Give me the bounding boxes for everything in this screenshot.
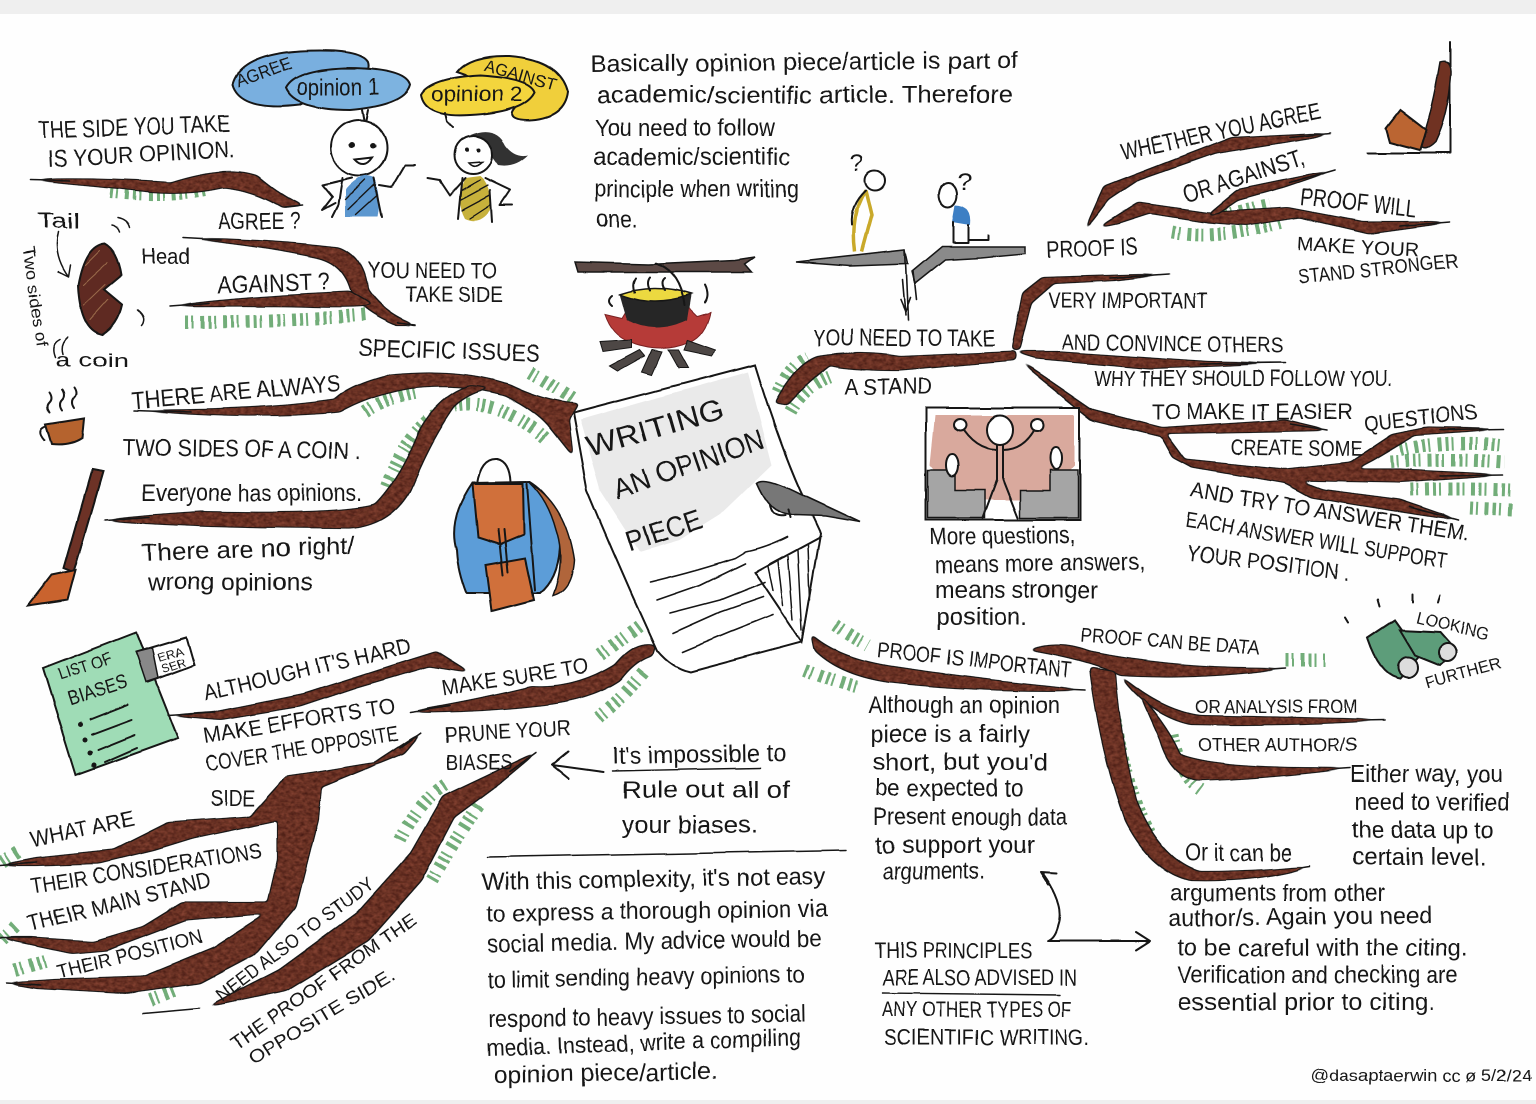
icon: pen: [757, 481, 860, 522]
branch: although it's hard and the tree: COVER THE OPPOSITE: [204, 721, 400, 776]
branch: proof is important: Or it can be: [1185, 840, 1292, 867]
icon: speech bubbles: opinion 2: [431, 83, 523, 106]
text: arguments from other authors: arguments from other: [1170, 880, 1385, 907]
main left branch: THERE ARE ALWAYS: [131, 370, 342, 415]
icon: speech bubbles: [232, 50, 568, 128]
branch: you need to take a stand: AND TRY TO ANSWER THEM.: [1189, 477, 1472, 546]
text: complexity advice: [482, 850, 846, 1089]
branch: although it's hard and the tree: THEIR CONSIDERATIONS: [29, 838, 264, 899]
text: impossible to rule out: [612, 740, 790, 839]
branch: the side you take: IS YOUR OPINION.: [47, 136, 235, 173]
icon: try square and axe: [1367, 42, 1451, 153]
text: either way verify: the data up to: [1352, 817, 1494, 844]
text: these principles: ARE ALSO ADVISED IN: [882, 965, 1077, 990]
text: more questions: means stronger: [935, 577, 1098, 604]
branch: you need to take a stand: QUESTIONS: [1363, 399, 1478, 436]
icon: list of biases: SER: [160, 655, 187, 676]
text: arguments from other authors: [1168, 880, 1468, 1016]
branch: proof is: OR AGAINST,: [1180, 144, 1308, 209]
icon: coin: [18, 208, 190, 372]
branch: agree or against: SPECIFIC ISSUES: [358, 334, 541, 367]
branch: although it's hard and the tree: [0, 625, 655, 1069]
text: complexity advice: to limit sending heavy opinions to: [487, 961, 805, 994]
intro text block: academic/scientific: [593, 144, 790, 171]
icon: binoculars: LOOKING: [1414, 607, 1491, 644]
signature: @dasaptaerwin cc ø 5/2/24: [1310, 1066, 1532, 1085]
text: either way verify: need to verified: [1355, 789, 1510, 816]
icon: people on split ground: [797, 149, 1025, 320]
main left branch: TWO SIDES OF A COIN .: [123, 434, 360, 465]
branch: proof is: WHETHER YOU AGREE: [1119, 97, 1324, 166]
intro text block: You need to follow: [595, 115, 776, 142]
text: although an opinion piece: be expected to: [875, 775, 1023, 802]
icon: people on split ground: ?: [957, 169, 972, 196]
branch: the side you take: [30, 110, 302, 207]
branch: although it's hard and the tree: NEED ALSO TO STUDY: [212, 874, 379, 1006]
icon: woman with opinion 2: [428, 132, 528, 222]
branch: proof is important: OTHER AUTHOR/S: [1198, 735, 1357, 755]
icon: speech bubbles: opinion 1: [297, 74, 379, 101]
icon: people on split ground: ?: [850, 149, 864, 176]
icon: man with opinion 1: [322, 120, 415, 217]
branch: you need to take a stand: [775, 274, 1512, 585]
intro text block: principle when writing: [595, 176, 798, 203]
text: either way verify: Either way, you: [1350, 761, 1503, 788]
branch: you need to take a stand: AND CONVINCE OTHERS: [1062, 329, 1283, 358]
intro text block: one.: [597, 206, 637, 233]
central paper: [573, 365, 820, 672]
branch: you need to take a stand: VERY IMPORTANT: [1048, 288, 1207, 313]
text: either way verify: certain level.: [1352, 844, 1486, 871]
intro text block: academic/scientific article. Therefore: [597, 82, 1013, 109]
branch: the side you take: THE SIDE YOU TAKE: [37, 110, 230, 144]
title: PIECE: [622, 504, 706, 559]
icon: backpack: [455, 459, 574, 611]
icon: speech bubbles: AGREE: [233, 53, 294, 92]
text: although an opinion piece: Present enough data: [873, 804, 1069, 831]
branch: although it's hard and the tree: SIDE: [210, 786, 255, 811]
text: complexity advice: media. Instead, write a compiling: [486, 1024, 801, 1062]
icon: debate picture: [926, 408, 1080, 520]
branch: although it's hard and the tree: THE PROOF FROM THE: [227, 910, 421, 1054]
icon: coin: Head: [142, 244, 190, 269]
title: AN OPINION: [609, 424, 769, 506]
icon: hoe: [28, 470, 103, 606]
text: arguments from other authors: author/s. Again you need: [1168, 901, 1432, 933]
branch: proof is important: OR ANALYSIS FROM: [1195, 697, 1357, 717]
branch: although it's hard and the tree: THEIR MAIN STAND: [25, 867, 213, 937]
icon: steaming cup: [41, 388, 84, 444]
icon: pot over fire: [575, 257, 755, 375]
branch: agree or against: YOU NEED TO: [368, 258, 497, 283]
text: although an opinion piece: piece is a fairly: [870, 721, 1030, 748]
branch: although it's hard and the tree: MAKE SURE TO: [440, 653, 590, 701]
main left branch: There are no right/: [141, 533, 355, 567]
branch: you need to take a stand: TO MAKE IT EASIER: [1152, 399, 1352, 424]
branch: although it's hard and the tree: BIASES: [446, 750, 512, 775]
icon: binoculars: FURTHER: [1423, 653, 1503, 692]
text: more questions: [930, 521, 1145, 631]
branch: proof is important: PROOF IS IMPORTANT: [876, 637, 1073, 682]
branch: you need to take a stand: CREATE SOME: [1230, 434, 1362, 461]
icon: list of biases: ERA: [156, 644, 185, 665]
branch: agree or against: AGREE ?: [218, 208, 300, 235]
branch: you need to take a stand: WHY THEY SHOULD FOLLOW YOU.: [1094, 366, 1392, 391]
branch: proof is: PROOF WILL: [1299, 184, 1418, 223]
text: complexity advice: social media. My advice would be: [487, 925, 822, 958]
icon: coin: Two sides of: [18, 246, 51, 348]
text: complexity advice: to express a thorough opinion via: [487, 895, 829, 928]
icon: coin: Tail: [37, 208, 80, 233]
text: more questions: position.: [936, 604, 1028, 631]
branch: proof is: STAND STRONGER: [1296, 250, 1460, 289]
text: these principles: SCIENTIFIC WRITING.: [884, 1025, 1090, 1050]
text: impossible to rule out: your biases.: [622, 812, 757, 839]
icon: list of biases: LIST OF: [55, 648, 114, 684]
text: more questions: means more answers,: [935, 548, 1145, 579]
branch: you need to take a stand: YOUR POSITION .: [1185, 540, 1351, 585]
main left branch: [105, 370, 577, 596]
branch: although it's hard and the tree: OPPOSITE SIDE.: [245, 965, 400, 1069]
main left branch: Everyone has opinions.: [142, 480, 362, 507]
branch: you need to take a stand: YOU NEED TO TAKE: [813, 325, 995, 352]
branch: agree or against: [170, 208, 541, 367]
text: either way verify: [1350, 761, 1510, 871]
intro text block: Basically opinion piece/article is part of: [590, 47, 1018, 78]
branch: proof is: PROOF IS: [1046, 234, 1138, 264]
icon: list of biases: [43, 632, 194, 775]
branch: agree or against: TAKE SIDE: [405, 282, 503, 307]
text: complexity advice: opinion piece/article.: [494, 1058, 718, 1089]
branch: proof is important: [805, 625, 1385, 880]
icon: coin: a coin: [55, 351, 128, 372]
icon: speech bubbles: AGAINST: [482, 56, 559, 95]
branch: proof is: MAKE YOUR: [1297, 233, 1421, 261]
branch tips: [0, 133, 1503, 1013]
text: although an opinion piece: short, but you'd: [872, 749, 1048, 776]
text: more questions: More questions,: [930, 521, 1075, 551]
text: although an opinion piece: [868, 692, 1069, 885]
intro text block: [590, 47, 1018, 233]
text: complexity advice: With this complexity, it's not easy: [482, 863, 826, 896]
arrow: to prune your biases: [552, 752, 603, 778]
branch: although it's hard and the tree: ALTHOUGH IT'S HARD: [201, 633, 413, 705]
text: these principles: [875, 938, 1090, 1050]
icon: binoculars: [1345, 594, 1503, 692]
branch: although it's hard and the tree: THEIR POSITION: [54, 926, 205, 984]
text: although an opinion piece: to support your: [875, 832, 1035, 859]
branch: although it's hard and the tree: MAKE EFFORTS TO: [202, 693, 396, 748]
text: arguments from other authors: essential prior to citing.: [1178, 989, 1435, 1016]
main left branch: wrong opinions: [147, 569, 312, 596]
title: WRITING: [582, 394, 728, 464]
text: arguments from other authors: to be careful with the citing.: [1178, 935, 1468, 962]
text: these principles: ANY OTHER TYPES OF: [882, 997, 1072, 1022]
branch: although it's hard and the tree: PRUNE YOUR: [444, 715, 571, 747]
text: although an opinion piece: arguments.: [882, 858, 985, 885]
icon: list of biases: BIASES: [65, 671, 131, 711]
title: [582, 394, 769, 559]
text: arguments from other authors: Verification and checking are: [1178, 962, 1458, 989]
branch: agree or against: AGAINST ?: [217, 268, 330, 299]
text: impossible to rule out: It's impossible to: [612, 740, 786, 770]
text: these principles: THIS PRINCIPLES: [875, 938, 1032, 963]
branch: you need to take a stand: EACH ANSWER WILL SUPPORT: [1184, 507, 1449, 573]
branch: although it's hard and the tree: WHAT ARE: [28, 806, 136, 852]
arrow: bracket to both notes: [1040, 872, 1150, 950]
branch: proof is: [1046, 97, 1460, 289]
branch: you need to take a stand: A STAND: [845, 374, 932, 399]
text: complexity advice: respond to heavy issues to social: [489, 1000, 806, 1033]
branch: proof is important: PROOF CAN BE DATA: [1080, 625, 1261, 660]
text: impossible to rule out: Rule out all of: [622, 777, 790, 804]
text: although an opinion piece: Although an opinion: [868, 692, 1060, 719]
